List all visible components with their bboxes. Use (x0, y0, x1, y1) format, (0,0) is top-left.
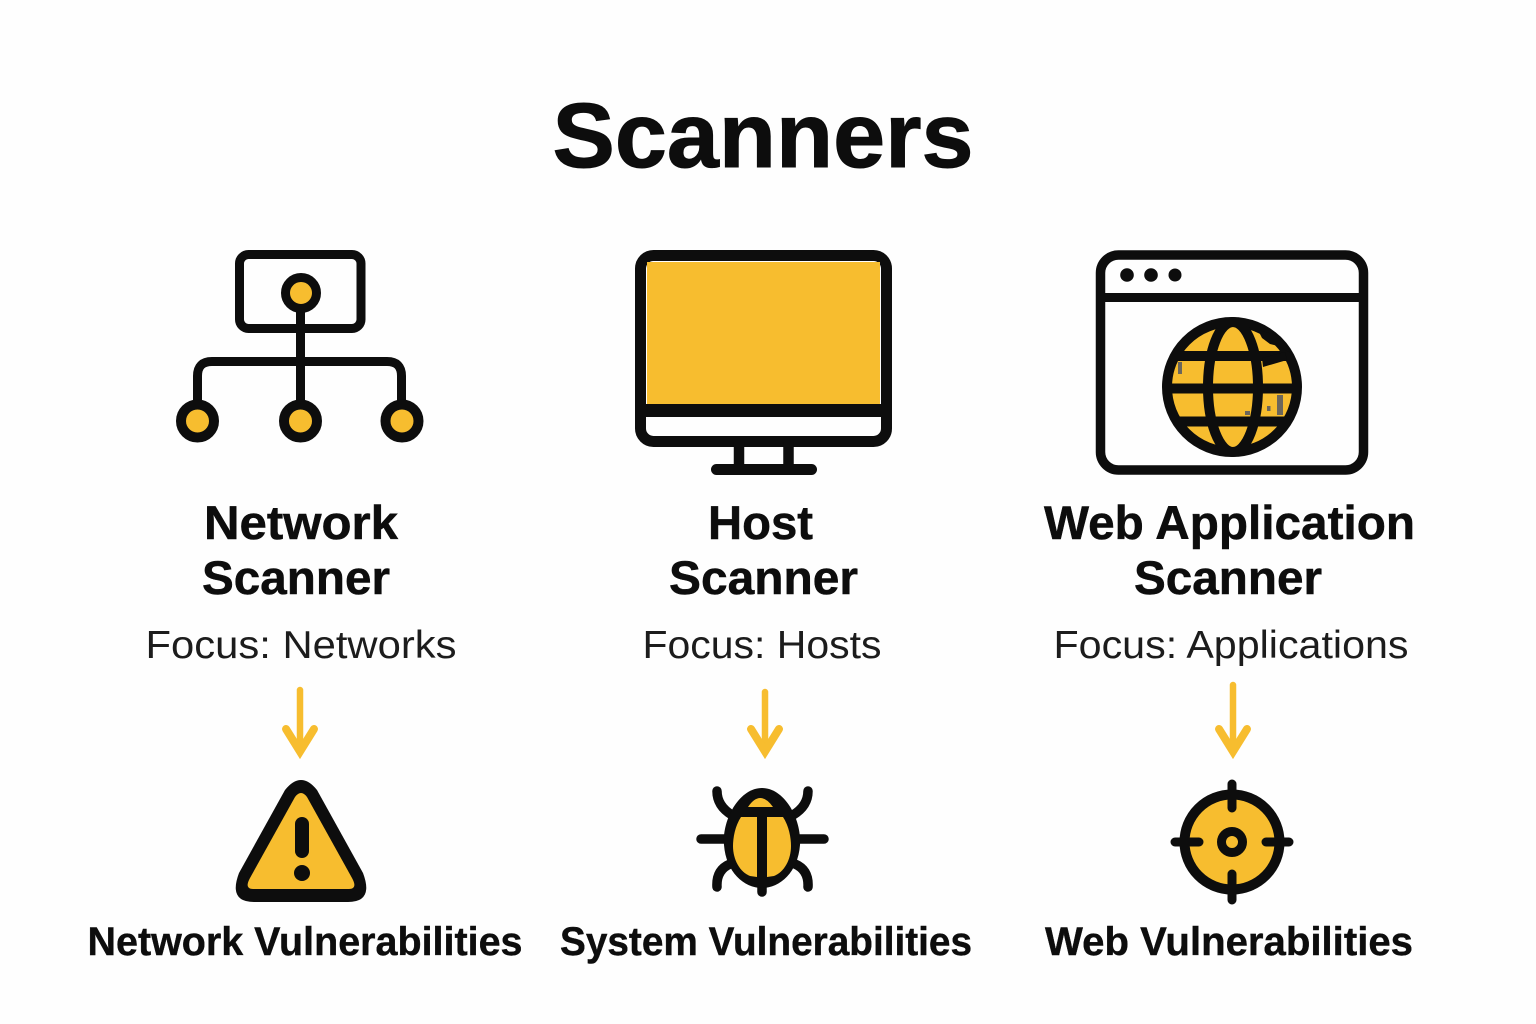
heading: web application scanner (1044, 496, 1415, 604)
heading: host scanner: Scanner (669, 551, 858, 604)
heading: host scanner: Host (708, 496, 813, 549)
label: web vulnerabilities: Web Vulnerabilities (1045, 920, 1413, 964)
label: system vulnerabilities: System Vulnerabilities (560, 920, 972, 964)
icon: warning triangle (236, 780, 366, 902)
heading: network scanner (202, 496, 399, 604)
focus text: hosts: Focus: Hosts (642, 624, 882, 667)
label: network vulnerabilities: Network Vulnerabilities (88, 920, 522, 964)
arrow: network (286, 690, 314, 752)
arrow: web (1219, 685, 1247, 752)
icon: monitor (640, 256, 887, 475)
icon: browser globe (1100, 255, 1364, 470)
heading: network scanner: Scanner (202, 551, 390, 604)
heading: web application scanner: Scanner (1134, 551, 1322, 604)
arrow: host (751, 692, 779, 752)
title: Scanners (552, 85, 974, 187)
panel: web application scanner (1044, 255, 1415, 964)
heading: network scanner: Network (204, 496, 399, 549)
icon: target crosshair (1175, 784, 1289, 900)
heading: host scanner (669, 496, 858, 604)
panel: host scanner (560, 256, 972, 964)
heading: web application scanner: Web Application (1044, 496, 1415, 549)
icon: network tree (181, 254, 418, 438)
icon: bug (701, 788, 824, 892)
focus text: applications: Focus: Applications (1054, 624, 1408, 667)
panel: network scanner (88, 254, 522, 964)
focus text: networks: Focus: Networks (146, 624, 456, 667)
